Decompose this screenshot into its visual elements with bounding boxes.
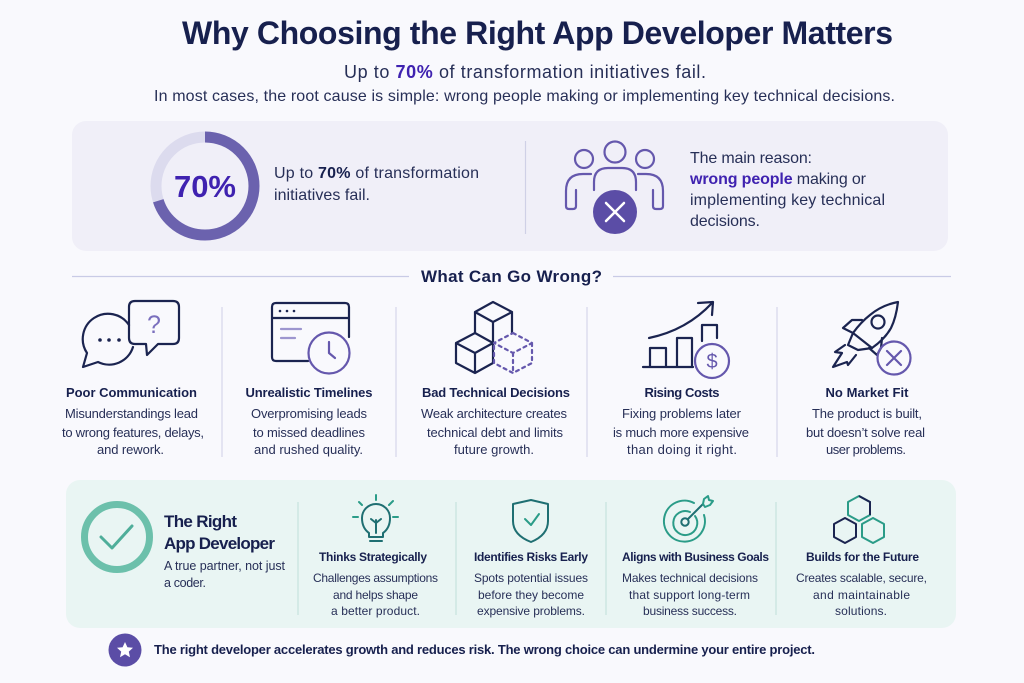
text: aligns with business goals bbox=[622, 550, 769, 618]
text: no market fit: The product is built, bbox=[812, 406, 922, 421]
text: builds for the future: Creates scalable, secure, bbox=[796, 571, 927, 585]
text: rising costs: Fixing problems later bbox=[622, 406, 742, 421]
panel: poor communication bbox=[62, 301, 204, 457]
text: no market fit bbox=[806, 385, 925, 457]
icon: star badge bbox=[108, 634, 142, 666]
text: bad technical decisions: future growth. bbox=[454, 442, 534, 457]
text: identifies risks early: Identifies Risks Early bbox=[474, 550, 588, 564]
icon: speech bubbles: ? bbox=[147, 311, 161, 339]
text: builds for the future bbox=[796, 550, 927, 618]
text: identifies risks early: Spots potential issues bbox=[474, 571, 588, 585]
text: thinks strategically: and helps shape bbox=[333, 588, 418, 602]
subtitle: Up to 70% of transformation initiatives fail. bbox=[344, 62, 706, 82]
text: the right app developer: App Developer bbox=[164, 534, 275, 553]
text: thinks strategically: Challenges assumptions bbox=[313, 571, 438, 585]
panel: the right app developer bbox=[66, 480, 956, 628]
icon: people with X bbox=[566, 142, 663, 234]
icon: rocket with X bbox=[833, 302, 910, 374]
text: thinks strategically bbox=[313, 550, 438, 618]
subtitle bbox=[154, 62, 895, 105]
title: Why Choosing the Right App Developer Matters bbox=[182, 15, 893, 51]
text: poor communication: Poor Communication bbox=[66, 385, 197, 400]
panel: no market fit bbox=[806, 302, 925, 457]
subtitle: In most cases, the root cause is simple: wrong people making or implementing key technical decisions. bbox=[154, 88, 895, 105]
text: aligns with business goals: that support long-term bbox=[629, 588, 750, 602]
text: the right app developer: The Right bbox=[164, 512, 237, 531]
text: statistic: initiatives fail. bbox=[274, 187, 370, 204]
text: builds for the future: and maintainable bbox=[813, 588, 910, 602]
text: main reason: implementing key technical bbox=[690, 192, 885, 209]
text: rising costs: is much more expensive bbox=[613, 425, 749, 440]
text: unrealistic timelines bbox=[246, 385, 372, 457]
text: thinks strategically: a better product. bbox=[331, 604, 420, 618]
text: thinks strategically: Thinks Strategically bbox=[319, 550, 427, 564]
card: thinks strategically bbox=[313, 495, 438, 618]
heading: what can go wrong: What Can Go Wrong? bbox=[421, 267, 602, 286]
text: the right app developer bbox=[164, 512, 286, 590]
text: the right app developer: A true partner, not just bbox=[164, 559, 286, 573]
text: poor communication: and rework. bbox=[97, 442, 164, 457]
text: aligns with business goals: Aligns with Business Goals bbox=[622, 550, 769, 564]
text: unrealistic timelines: Overpromising leads bbox=[251, 406, 368, 421]
text: main reason bbox=[689, 150, 885, 230]
icon: shield bbox=[513, 500, 548, 542]
icon: rising bars with coin bbox=[643, 302, 729, 378]
text: unrealistic timelines: to missed deadlines bbox=[253, 425, 366, 440]
text: poor communication: Misunderstandings lead bbox=[65, 406, 198, 421]
text: footer message: The right developer accelerates growth and reduces risk. The wrong choice can undermine your entire project. bbox=[154, 642, 815, 657]
panel: unrealistic timelines bbox=[246, 303, 372, 457]
text: rising costs: Rising Costs bbox=[644, 385, 720, 400]
panel: key statistic bbox=[72, 121, 948, 251]
text: poor communication: to wrong features, delays, bbox=[62, 425, 204, 440]
text: unrealistic timelines: and rushed quality. bbox=[254, 442, 363, 457]
text: aligns with business goals: Makes technical decisions bbox=[622, 571, 758, 585]
text: the right app developer: a coder. bbox=[164, 576, 206, 590]
card: builds for the future bbox=[796, 496, 927, 618]
chart: 70% donut: 70% bbox=[174, 169, 236, 204]
footer callout bbox=[108, 634, 815, 666]
text: unrealistic timelines: Unrealistic Timelines bbox=[246, 385, 372, 400]
icon: window with clock bbox=[272, 303, 350, 374]
icon: cubes bbox=[456, 302, 532, 373]
text: bad technical decisions: Bad Technical Decisions bbox=[422, 385, 570, 400]
icon: speech bubbles bbox=[83, 301, 179, 367]
card: identifies risks early bbox=[474, 500, 588, 618]
text: aligns with business goals: business success. bbox=[643, 604, 737, 618]
text: poor communication bbox=[62, 385, 204, 457]
text: bad technical decisions bbox=[421, 385, 570, 457]
text: no market fit: but doesn’t solve real bbox=[806, 425, 925, 440]
icon: target bbox=[664, 496, 713, 542]
text: identifies risks early: before they become bbox=[478, 588, 584, 602]
panel: rising costs bbox=[613, 302, 749, 457]
text: rising costs: than doing it right. bbox=[627, 442, 737, 457]
chart: 70% donut bbox=[156, 137, 254, 235]
icon: check ring bbox=[84, 504, 150, 570]
icon: light bulb bbox=[353, 495, 398, 541]
text: builds for the future: solutions. bbox=[835, 604, 887, 618]
panel: bad technical decisions bbox=[421, 302, 570, 457]
text: rising costs bbox=[613, 385, 749, 457]
text: main reason: wrong people making or bbox=[689, 171, 867, 188]
icon: hexagons bbox=[834, 496, 884, 543]
text: statistic bbox=[274, 165, 479, 204]
text: bad technical decisions: Weak architecture creates bbox=[421, 406, 568, 421]
text: identifies risks early bbox=[474, 550, 588, 618]
text: no market fit: user problems. bbox=[826, 442, 906, 457]
text: main reason: decisions. bbox=[690, 213, 760, 230]
icon: rising bars with coin: $ bbox=[706, 351, 718, 373]
text: main reason: The main reason: bbox=[690, 150, 812, 167]
text: no market fit: No Market Fit bbox=[826, 385, 909, 400]
text: builds for the future: Builds for the Future bbox=[806, 550, 919, 564]
text: bad technical decisions: technical debt and limits bbox=[427, 425, 564, 440]
text: identifies risks early: expensive problems. bbox=[477, 604, 585, 618]
text: statistic: Up to 70% of transformation bbox=[274, 165, 479, 182]
card: aligns with business goals bbox=[622, 496, 769, 618]
